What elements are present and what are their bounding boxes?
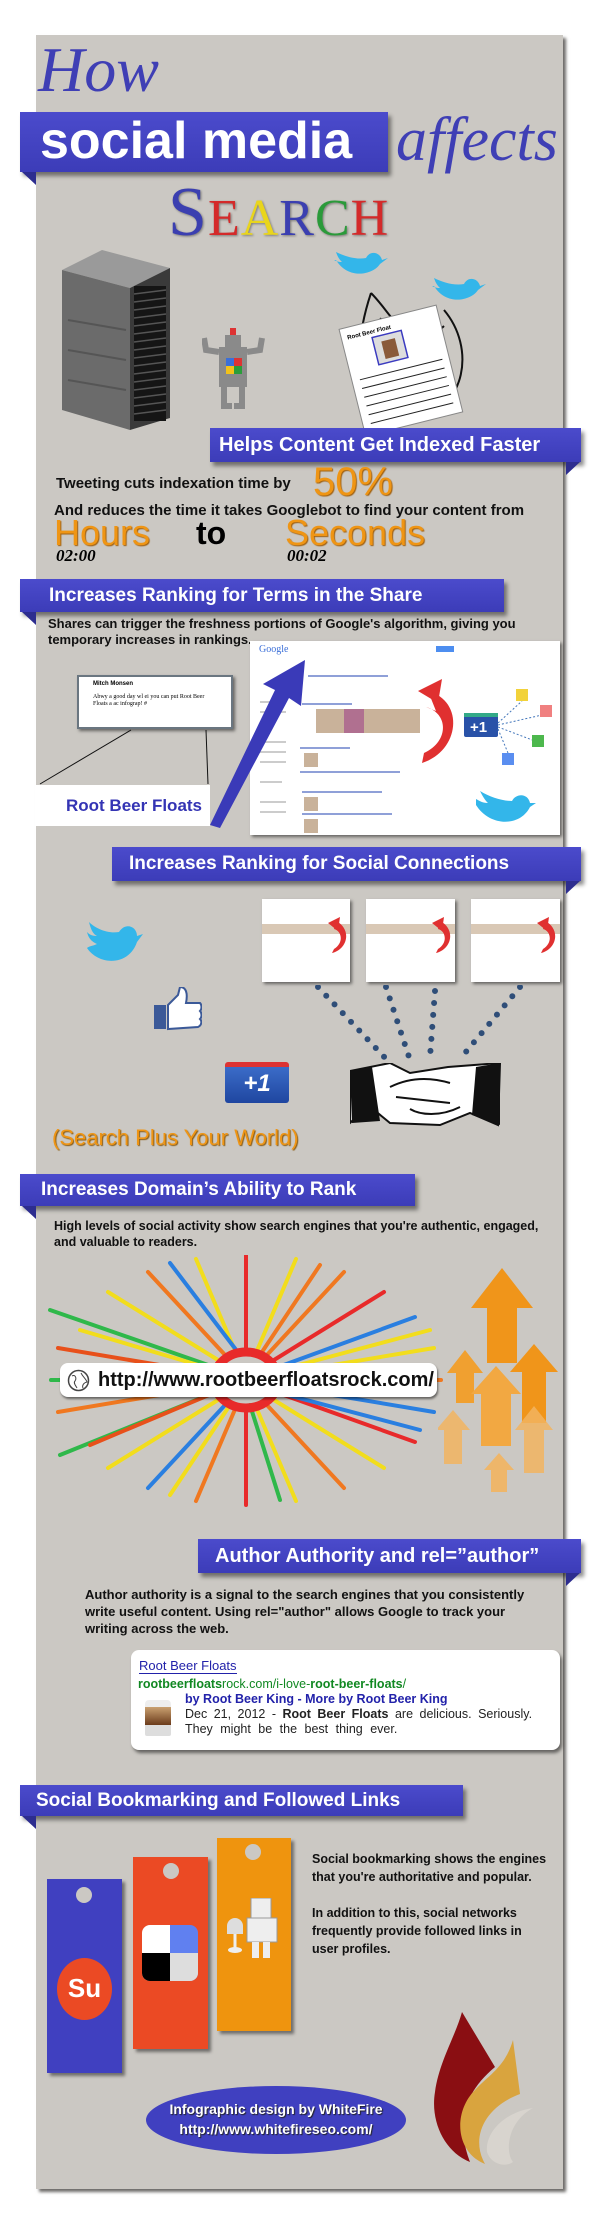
text: indexation stats: Hours [54, 512, 150, 553]
icon: document with twitter birds: Root Beer Float [347, 325, 392, 341]
text: bookmarking: user profiles. [312, 1942, 390, 1956]
banner: Social Bookmarking [20, 1785, 463, 1816]
arrow: big blue [210, 660, 305, 828]
banner: Social Bookmarking: Social Bookmarking and Followed Links [36, 1790, 400, 1811]
icon: +1 badge [225, 1062, 289, 1103]
text: indexation stats: And reduces the time it takes Googlebot to find your content from [54, 502, 524, 519]
text: Search Plus Your World: (Search Plus Your World) [52, 1125, 299, 1150]
icon: whitefire logo [434, 2012, 532, 2164]
credit ellipse: http://www.whitefireseo.com/ [179, 2121, 373, 2137]
text: bookmarking: Social bookmarking shows the engines [312, 1852, 546, 1866]
icon: server tower [62, 250, 170, 430]
text: indexation stats [54, 460, 524, 565]
url box [60, 1363, 437, 1397]
banner: Increases Ranking for Terms in the Share: Increases Ranking for Terms in the Share [49, 585, 422, 606]
search result card: rootbeerfloatsrock.com/i-love-root-beer-floats/ [138, 1677, 406, 1691]
text: indexation stats: 02:00 [56, 546, 96, 565]
text: indexation stats: Tweeting cuts indexation time by [56, 475, 291, 492]
text: indexation stats: Seconds [285, 512, 425, 553]
tag: stumbleupon [47, 1879, 122, 2073]
banner: Increases Domain's Ability to Rank [20, 1174, 415, 1206]
banner: Author Authority [198, 1539, 581, 1573]
credit ellipse: Infographic design by WhiteFire [169, 2101, 383, 2117]
title: How: How [38, 34, 159, 105]
title: Search: SEARCH [168, 174, 389, 251]
banner: Author Authority: Author Authority and rel=”author” [215, 1545, 539, 1567]
chart: orange up arrows [438, 1268, 558, 1492]
tag: stumbleupon: Su [68, 1973, 101, 2003]
dotted connection lines [315, 985, 523, 1060]
credit ellipse [146, 2086, 406, 2154]
tweet box: Mitch Monsen [93, 681, 133, 687]
banner: Helps Content Get Indexed Faster: Helps Content Get Indexed Faster [219, 434, 540, 456]
tag: delicious [133, 1857, 208, 2049]
text: freshness: temporary increases in rankings. [48, 632, 252, 647]
chart: starburst [48, 1255, 443, 1507]
text: author authority: write useful content. Using rel="author" allows Google to track your [85, 1604, 505, 1619]
screenshot: google search results: +1 [470, 719, 487, 736]
banner: Increases Domain's Ability to Rank: Increases Domain’s Ability to Rank [41, 1179, 356, 1200]
screenshot: google search results: Google [259, 644, 289, 655]
text: indexation stats: 50% [313, 460, 393, 504]
icon: root beer mug [145, 1700, 171, 1736]
banner: Increases Ranking for Social Connections: Increases Ranking for Social Connections [129, 853, 509, 874]
icon: globe [68, 1370, 90, 1392]
text: bookmarking: In addition to this, social networks [312, 1906, 517, 1920]
text: freshness [48, 616, 516, 647]
title: affects: affects [396, 106, 558, 174]
icon: +1 badge: +1 [243, 1070, 271, 1097]
banner: Helps Content Get Indexed Faster [210, 428, 581, 462]
text: social activity: High levels of social activity show search engines that you're authentic, engaged, [54, 1219, 538, 1233]
title banner: social media: social media [40, 112, 352, 170]
icon: googlebot robot [202, 328, 265, 409]
tweet box: Abwy a good day wl ei you can put Root Beer Floats a ac infograp! # [93, 694, 204, 707]
screenshot: google search results [250, 641, 560, 835]
text: bookmarking: frequently provide followed links in [312, 1924, 522, 1938]
icon: facebook like [154, 987, 202, 1030]
text: social activity: and valuable to readers. [54, 1235, 197, 1249]
search result card: Root Beer Floats [139, 1658, 237, 1673]
icon: document with twitter birds [334, 252, 486, 428]
text: author authority: writing across the web. [85, 1621, 229, 1636]
text: bookmarking [312, 1852, 546, 1956]
search result card: They might be the best thing ever. [185, 1722, 397, 1736]
url box: http://www.rootbeerfloatsrock.com/ [98, 1369, 434, 1391]
search result card: by Root Beer King - More by Root Beer King [185, 1692, 448, 1706]
search result card: Dec 21, 2012 - Root Beer Floats are delicious. Seriously. [185, 1707, 532, 1721]
text: bookmarking: that you're authoritative and popular. [312, 1870, 532, 1884]
banner: Increases Ranking for Terms in the Share [20, 579, 504, 612]
screenshots: three results [262, 899, 564, 986]
callout lines [40, 730, 208, 784]
text: indexation stats: to [196, 515, 226, 551]
text: freshness: Shares can trigger the freshness portions of Google's algorithm, giving you [48, 616, 516, 631]
text: social activity [54, 1219, 538, 1249]
icon: handshake [350, 1063, 501, 1126]
text: author authority: Author authority is a signal to the search engines that you consistently [85, 1587, 524, 1602]
tag: digg [217, 1838, 291, 2031]
tweet box [77, 675, 233, 729]
text: indexation stats: 00:02 [287, 546, 327, 565]
label: Root Beer Floats: Root Beer Floats [66, 796, 202, 815]
text: author authority [85, 1587, 524, 1636]
search result card [131, 1650, 560, 1750]
banner: Increases Ranking for Social Connections [112, 847, 581, 881]
label: Root Beer Floats [35, 785, 210, 826]
icon: twitter bird [87, 922, 143, 961]
